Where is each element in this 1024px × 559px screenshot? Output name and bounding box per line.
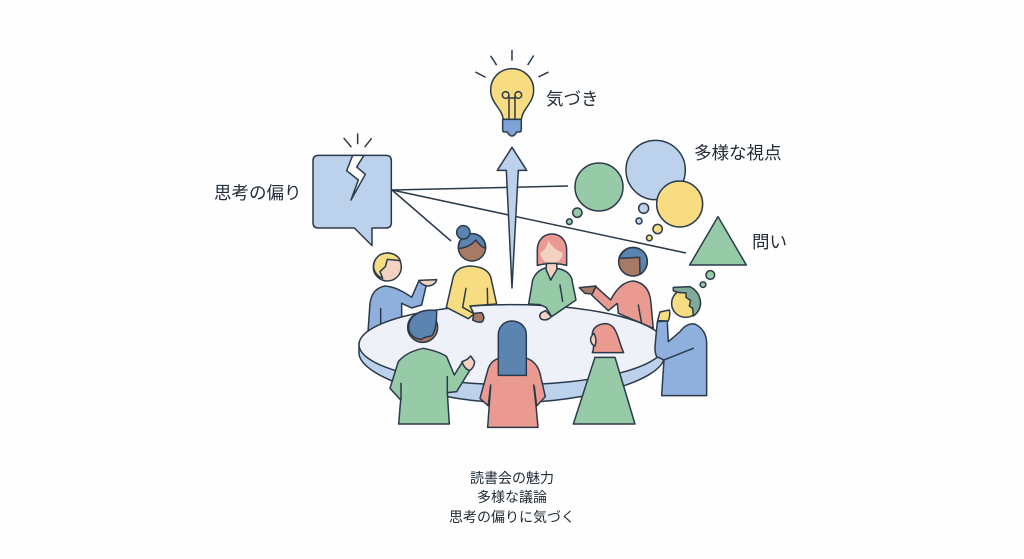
caption (449, 470, 575, 525)
icon: thought circles (566, 140, 703, 241)
label: diverse viewpoints: 多様な視点 (694, 143, 782, 163)
person: triangular figure, front right (573, 324, 635, 424)
caption line 3: 思考の偏りに気づく (449, 509, 575, 525)
table: round discussion table (359, 305, 665, 403)
label: awareness: 気づき (546, 89, 598, 109)
person: woman in green (529, 234, 576, 320)
icon: cracked speech bubble (313, 134, 391, 246)
discussion scene (359, 226, 707, 427)
caption line 1: 読書会の魅力 (470, 470, 554, 486)
caption line 2: 多様な議論 (477, 489, 547, 505)
person: woman with long hair, front centre (480, 321, 545, 427)
connector lines from biased thinking bubble (392, 186, 686, 253)
person: woman in yellow (446, 226, 497, 322)
icon: question triangle (690, 217, 746, 287)
label: question: 問い (752, 232, 787, 252)
person: man in blue, right (655, 287, 707, 396)
label: bias: 思考の偏り (214, 183, 302, 203)
person: man in green, front left (390, 310, 475, 424)
icon: light bulb (476, 50, 548, 136)
person: blond man, back left (368, 253, 437, 332)
arrow: upward (497, 147, 527, 288)
person: dark-skinned man, back right (579, 247, 653, 328)
